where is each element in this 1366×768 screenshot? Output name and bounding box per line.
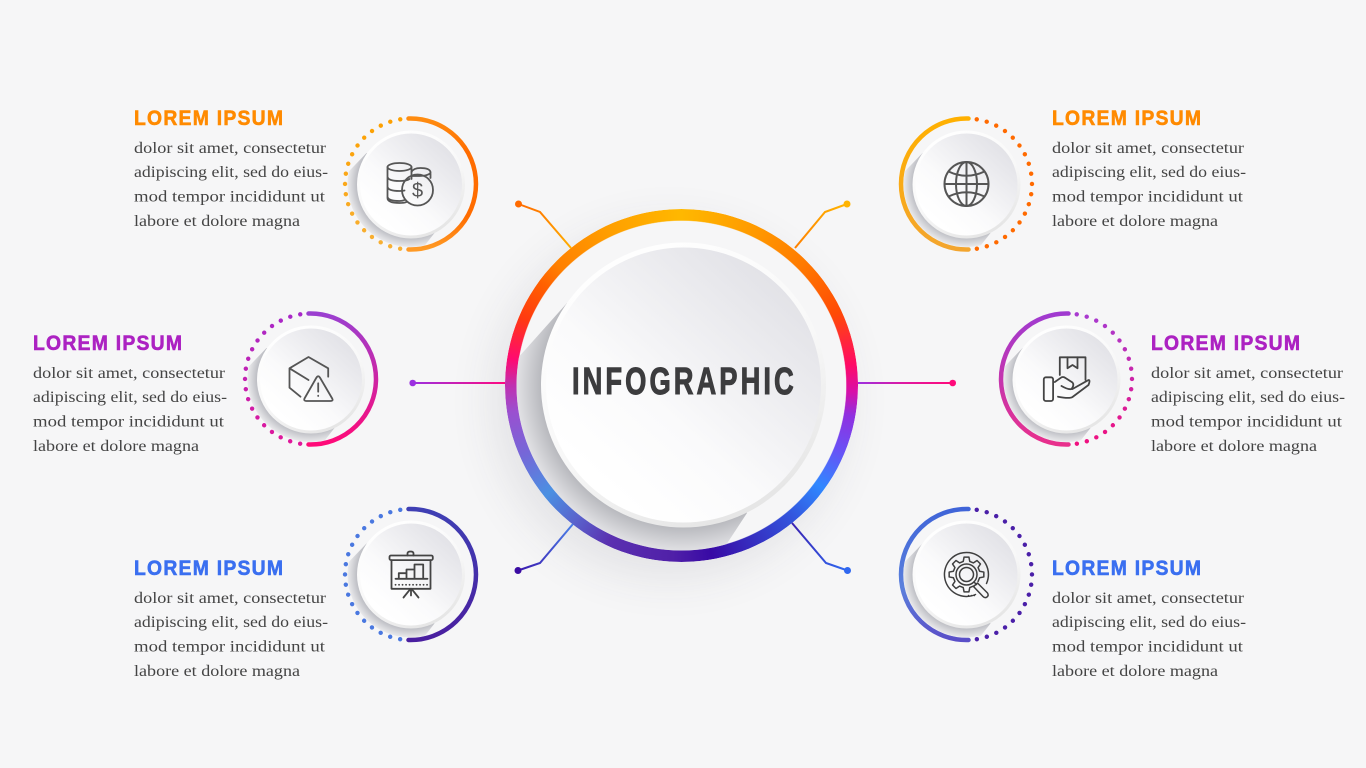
text block: middle right: labore et dolore magna — [1151, 438, 1317, 455]
connector: bottom right — [792, 523, 851, 574]
text block: top right — [1052, 106, 1246, 230]
icon: gear with magnifier — [944, 552, 988, 598]
badge: coins — [340, 118, 476, 256]
text block: top right: LOREM IPSUM — [1052, 106, 1201, 130]
badge: presentation — [340, 509, 476, 646]
central gradient ring — [505, 209, 858, 562]
text block: middle left: mod tempor incididunt ut — [33, 414, 225, 430]
text block: middle right: mod tempor incididunt ut — [1151, 414, 1343, 430]
text block: bottom left: adipiscing elit, sed do eius- — [134, 614, 328, 631]
text block: top right: dolor sit amet, consectetur — [1052, 140, 1245, 157]
connector: top right — [795, 200, 850, 248]
central title: INFOGRAPHIC — [572, 361, 794, 403]
text block: middle left — [33, 331, 227, 455]
badge: box warning — [240, 314, 376, 451]
connector: top left — [515, 200, 571, 248]
text block: middle right: adipiscing elit, sed do eius- — [1151, 389, 1345, 406]
text block: bottom right: dolor sit amet, consectetur — [1052, 590, 1245, 607]
text block: top left: dolor sit amet, consectetur — [134, 140, 327, 157]
text block: bottom right: mod tempor incididunt ut — [1052, 638, 1244, 656]
text block: top left: LOREM IPSUM — [134, 106, 283, 130]
text block: bottom right: LOREM IPSUM — [1052, 556, 1201, 580]
text block: middle left: adipiscing elit, sed do eius- — [33, 389, 227, 406]
text block: bottom left: LOREM IPSUM — [134, 556, 283, 580]
badge: gear search — [896, 509, 1032, 646]
text block: top right: adipiscing elit, sed do eius- — [1052, 164, 1246, 181]
text block: bottom right — [1052, 556, 1246, 680]
text block: top left: mod tempor incididunt ut — [134, 188, 326, 206]
central disc — [516, 248, 825, 550]
text block: middle left: LOREM IPSUM — [33, 331, 182, 355]
text block: top left — [134, 106, 328, 230]
text block: middle right: LOREM IPSUM — [1151, 331, 1300, 355]
text block: top left: adipiscing elit, sed do eius- — [134, 164, 328, 181]
icon: box with warning — [290, 357, 333, 401]
icon: presentation board — [390, 552, 433, 598]
connector: middle right — [858, 380, 956, 386]
text block: bottom left: mod tempor incididunt ut — [134, 638, 326, 656]
text block: bottom right: adipiscing elit, sed do eius- — [1052, 614, 1246, 631]
icon: hand holding parcel — [1044, 357, 1090, 401]
text block: bottom left — [134, 556, 328, 680]
text block: top right: mod tempor incididunt ut — [1052, 188, 1244, 206]
text block: top left: labore et dolore magna — [134, 213, 300, 230]
text block: middle right — [1151, 331, 1345, 455]
icon: coins: $ — [412, 180, 423, 202]
badge: hand with parcel — [996, 314, 1132, 451]
text block: bottom left: dolor sit amet, consectetur — [134, 590, 327, 607]
text block: bottom right: labore et dolore magna — [1052, 663, 1218, 680]
connector: bottom left — [514, 524, 573, 574]
text block: bottom left: labore et dolore magna — [134, 663, 300, 680]
text block: middle left: dolor sit amet, consectetur — [33, 365, 226, 382]
badge: globe — [896, 119, 1032, 256]
text block: middle right: dolor sit amet, consectetur — [1151, 365, 1344, 382]
text block: top right: labore et dolore magna — [1052, 213, 1218, 230]
connector: middle left — [409, 380, 505, 386]
icon: globe — [944, 162, 988, 206]
text block: middle left: labore et dolore magna — [33, 438, 199, 455]
